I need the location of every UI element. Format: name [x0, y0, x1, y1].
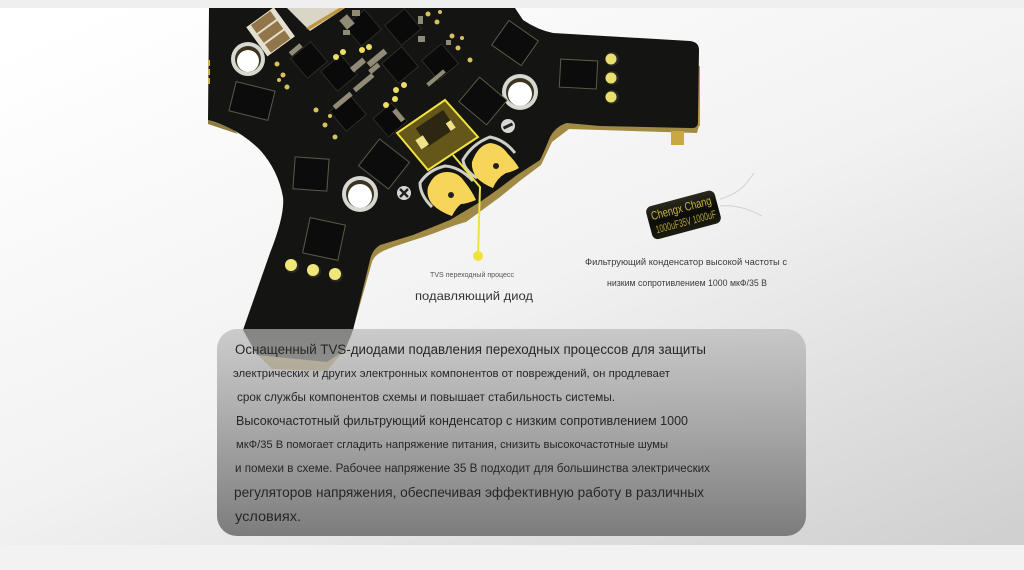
- description text: электрических и других электронных компонентов от повреждений, он продлевает: [233, 368, 670, 380]
- mounting hole right: [502, 74, 538, 110]
- tab under right arm: [671, 131, 684, 145]
- left arc gold sliver: [208, 120, 238, 134]
- positive power pad: [420, 166, 476, 216]
- circuit board: [208, 7, 700, 371]
- TVS diode highlight: [397, 100, 478, 170]
- test points: [333, 44, 407, 108]
- description text: срок службы компонентов схемы и повышает стабильность системы.: [237, 392, 615, 404]
- small IC chips: [291, 9, 458, 137]
- capacitor caption: Фильтрующий конденсатор высокой частоты с: [585, 257, 788, 267]
- description text: условиях.: [235, 509, 301, 524]
- description text: Высокочастотный фильтрующий конденсатор с низким сопротивлением 1000: [236, 414, 688, 428]
- plus marking: [397, 186, 411, 200]
- description text: [233, 342, 710, 524]
- power MOSFET chips: [229, 20, 598, 260]
- minus marking: [501, 119, 515, 133]
- top band: [0, 0, 1024, 8]
- description text: регуляторов напряжения, обеспечивая эффективную работу в различных: [234, 485, 704, 500]
- contact pads right arm: [605, 52, 619, 104]
- TVS caption: подавляющий диод: [415, 289, 533, 303]
- capacitor: Chengx Chang: [649, 193, 713, 223]
- right side gold sliver: [698, 66, 700, 126]
- capacitor: 1000uF35V 1000uF: [655, 209, 718, 236]
- gold foot of board: [255, 348, 346, 371]
- TVS caption: [415, 271, 533, 303]
- inductor block: [246, 7, 295, 56]
- description text: и помехи в схеме. Рабочее напряжение 35 В подходит для большинства электрических: [235, 463, 710, 475]
- description text: мкФ/35 В помогает сгладить напряжение питания, снизить высокочастотные шумы: [236, 439, 668, 451]
- TVS caption: TVS переходный процесс: [430, 271, 514, 279]
- description text: Оснащенный TVS-диодами подавления переходных процессов для защиты: [235, 342, 706, 357]
- contact pads lower arm: [285, 259, 343, 282]
- capacitor caption: низким сопротивлением 1000 мкФ/35 В: [607, 278, 767, 288]
- description panel: [217, 329, 806, 536]
- small component clusters: [289, 10, 451, 122]
- connector top: [287, 8, 345, 31]
- bottom band: [0, 545, 1024, 570]
- mounting hole top left: [231, 42, 265, 76]
- board body: [208, 8, 699, 362]
- negative power pad: [463, 137, 519, 188]
- callout line to TVS diode: [453, 155, 483, 261]
- edge contacts left: [208, 60, 210, 84]
- small gold passives: [274, 10, 472, 140]
- capacitor: [645, 173, 762, 240]
- board gold edge: [350, 118, 700, 340]
- capacitor caption: [585, 257, 788, 288]
- mounting hole lower: [342, 176, 378, 212]
- TVS diode body: [415, 110, 456, 149]
